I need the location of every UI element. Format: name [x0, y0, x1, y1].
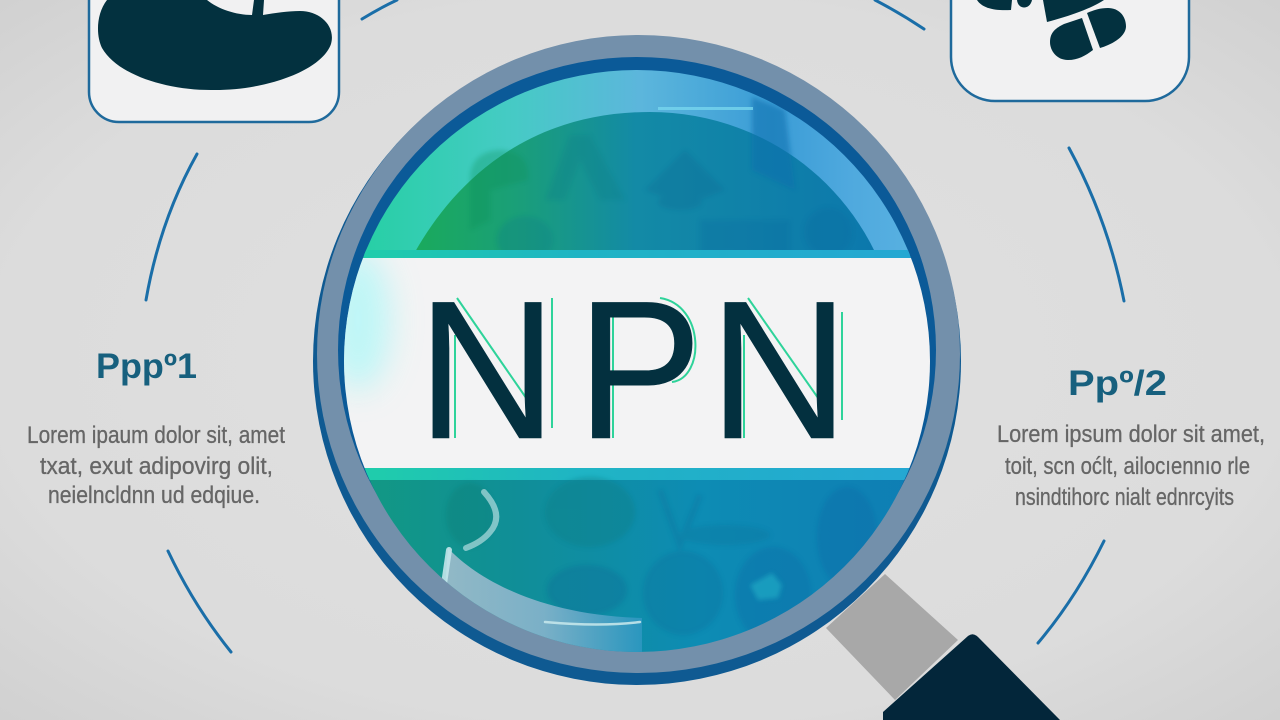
handle grip [883, 634, 1060, 720]
text block: left [27, 422, 285, 509]
lens glass [326, 65, 940, 660]
light blob [750, 573, 782, 600]
ghost icons: lower [446, 477, 877, 643]
cyan strip: top [340, 250, 940, 258]
label: left column [27, 347, 285, 509]
connector arcs [146, 0, 1124, 652]
ghost icons: upper [468, 148, 713, 250]
text block: right: nsindtihorc nialt ednrcyits [1015, 484, 1234, 511]
cyan strip: bottom [340, 468, 940, 480]
icon: organ silhouette [98, 0, 332, 90]
title letters: N [417, 260, 557, 480]
text block: left: neielncldnn ud edqiue. [48, 482, 260, 509]
lens outer rim [313, 37, 961, 685]
magnifying glass handle [826, 574, 1060, 720]
reflection crescent [445, 548, 642, 660]
text block: right [997, 421, 1265, 511]
label: right column [997, 364, 1265, 511]
white title band [340, 258, 940, 468]
lens highlight: top [658, 107, 753, 110]
text block: left: txat, exut adipovirg olit, [40, 453, 273, 480]
lower tinted area [364, 468, 909, 652]
heading: left: Pppº1 [96, 347, 197, 386]
icon card: left [89, 0, 339, 122]
upper tinted area [415, 112, 875, 252]
title letters [417, 260, 849, 480]
text block: left: Lorem ipaum dolor sit, amet [27, 422, 285, 449]
icon card: right [951, 0, 1189, 101]
NPN title with green offset lines [417, 260, 849, 480]
heading: right: Ppº/2 [1068, 364, 1167, 403]
magnifying glass lens [313, 35, 961, 685]
icon: capsule and fragments [977, 0, 1126, 60]
green offset lines [455, 298, 842, 438]
reflection strokes [444, 492, 640, 624]
title letters: P [577, 260, 702, 480]
cyan glow on band [326, 250, 390, 390]
title letters: N [709, 260, 849, 480]
